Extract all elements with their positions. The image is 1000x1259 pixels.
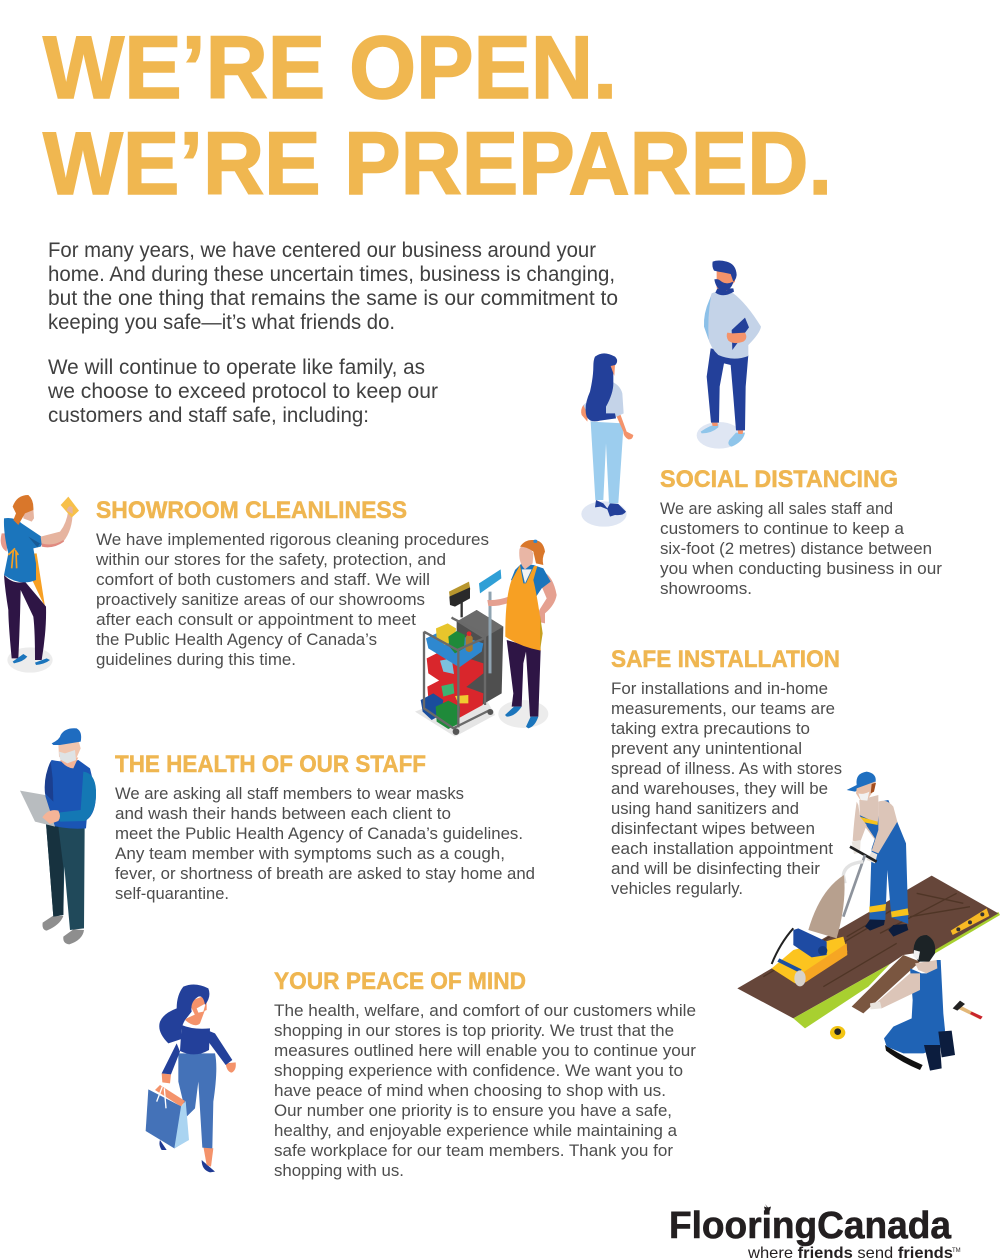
text: showroom cleanliness: within our stores for the safety, protection, and <box>95 550 446 569</box>
illustration: woman with long hair <box>581 353 633 527</box>
text: your peace of mind: healthy, and enjoyable experience while maintaining a <box>274 1121 678 1140</box>
logo: Flooring Canada: FlooringCanada <box>669 1205 952 1247</box>
text: showroom cleanliness: guidelines during this time. <box>96 650 296 669</box>
text: the health of our staff: fever, or shortness of breath are asked to stay home and <box>115 864 535 883</box>
text: safe installation: using hand sanitizers and <box>611 799 799 818</box>
text: showroom cleanliness: the Public Health Agency of Canada’s <box>96 630 377 649</box>
text: safe installation: and will be disinfecting their <box>611 859 820 878</box>
text: safe installation: vehicles regularly. <box>611 879 743 898</box>
heading: showroom cleanliness: SHOWROOM CLEANLINESS <box>96 497 407 524</box>
title: WE’RE PREPARED. <box>43 113 832 213</box>
text: safe installation: measurements, our teams are <box>611 699 835 718</box>
text: showroom cleanliness: We have implemented rigorous cleaning procedures <box>96 530 489 549</box>
text: the health of our staff: self-quarantine. <box>115 884 229 903</box>
intro text: customers and staff safe, including: <box>48 404 369 427</box>
illustration: cleaner with cart <box>415 540 557 737</box>
text: your peace of mind: shopping experience with confidence. We want you to <box>274 1061 683 1080</box>
heading: the health of our staff: THE HEALTH OF OUR STAFF <box>115 751 426 778</box>
intro text: but the one thing that remains the same is our commitment to <box>48 287 618 310</box>
heading: social distancing: SOCIAL DISTANCING <box>660 466 898 493</box>
intro text: home. And during these uncertain times, business is changing, <box>48 263 615 286</box>
text: your peace of mind: Our number one priority is to ensure you have a safe, <box>274 1101 672 1120</box>
text: showroom cleanliness: comfort of both customers and staff. We will <box>96 570 430 589</box>
text: your peace of mind: shopping in our stores is top priority. We trust that the <box>274 1021 674 1040</box>
text: social distancing: you when conducting business in our <box>660 559 942 578</box>
text: safe installation: each installation appointment <box>611 839 833 858</box>
illustration: man with tablet <box>697 260 761 449</box>
text: your peace of mind <box>274 1001 696 1180</box>
intro text: we choose to exceed protocol to keep our <box>47 380 438 403</box>
text: your peace of mind: safe workplace for our team members. Thank you for <box>274 1141 673 1160</box>
intro text: We will continue to operate like family, as <box>48 356 425 379</box>
text: showroom cleanliness: proactively sanitize areas of our showrooms <box>96 590 425 609</box>
illustration: shopper with bag <box>146 985 236 1172</box>
text: your peace of mind: The health, welfare, and comfort of our customers while <box>274 1001 696 1020</box>
text: showroom cleanliness: after each consult or appointment to meet <box>96 610 416 629</box>
text: social distancing: six-foot (2 metres) distance between <box>660 539 932 558</box>
text: your peace of mind: measures outlined here will enable you to continue your <box>274 1041 696 1060</box>
text: social distancing: showrooms. <box>660 579 752 598</box>
text: social distancing: We are asking all sales staff and <box>660 499 893 518</box>
text: social distancing: customers to continue to keep a <box>660 519 905 538</box>
text: safe installation <box>611 679 842 898</box>
heading: safe installation: SAFE INSTALLATION <box>611 646 840 673</box>
text: the health of our staff: We are asking all staff members to wear masks <box>115 784 464 803</box>
text: safe installation: spread of illness. As with stores <box>611 759 842 778</box>
icon: maple leaf <box>764 1204 771 1210</box>
text: safe installation: taking extra precautions to <box>611 719 810 738</box>
text: social distancing <box>660 499 942 598</box>
intro text <box>47 239 618 427</box>
text: safe installation: prevent any unintentional <box>611 739 802 758</box>
text: the health of our staff: Any team member with symptoms such as a cough, <box>115 844 505 863</box>
text: your peace of mind: have peace of mind when choosing to shop with us. <box>274 1081 666 1100</box>
illustration: flooring installers <box>737 772 1000 1071</box>
illustration: staff member with clipboard <box>20 728 96 944</box>
text: the health of our staff <box>115 784 535 903</box>
heading: your peace of mind: YOUR PEACE OF MIND <box>274 968 526 995</box>
text: safe installation: disinfectant wipes between <box>611 819 815 838</box>
intro text: keeping you safe—it’s what friends do. <box>48 311 395 334</box>
text: safe installation: and warehouses, they will be <box>611 779 828 798</box>
text: showroom cleanliness <box>95 530 489 669</box>
text: your peace of mind: shopping with us. <box>274 1161 404 1180</box>
intro text: For many years, we have centered our business around your <box>48 239 596 262</box>
illustration: cleaner wiping wall <box>1 495 79 673</box>
logo: Flooring Canada: TM <box>952 1248 961 1254</box>
text: the health of our staff: meet the Public Health Agency of Canada’s guidelines. <box>115 824 523 843</box>
title: WE’RE OPEN. <box>43 17 617 117</box>
title <box>43 17 832 213</box>
text: safe installation: For installations and in-home <box>611 679 828 698</box>
text: the health of our staff: and wash their hands between each client to <box>115 804 451 823</box>
